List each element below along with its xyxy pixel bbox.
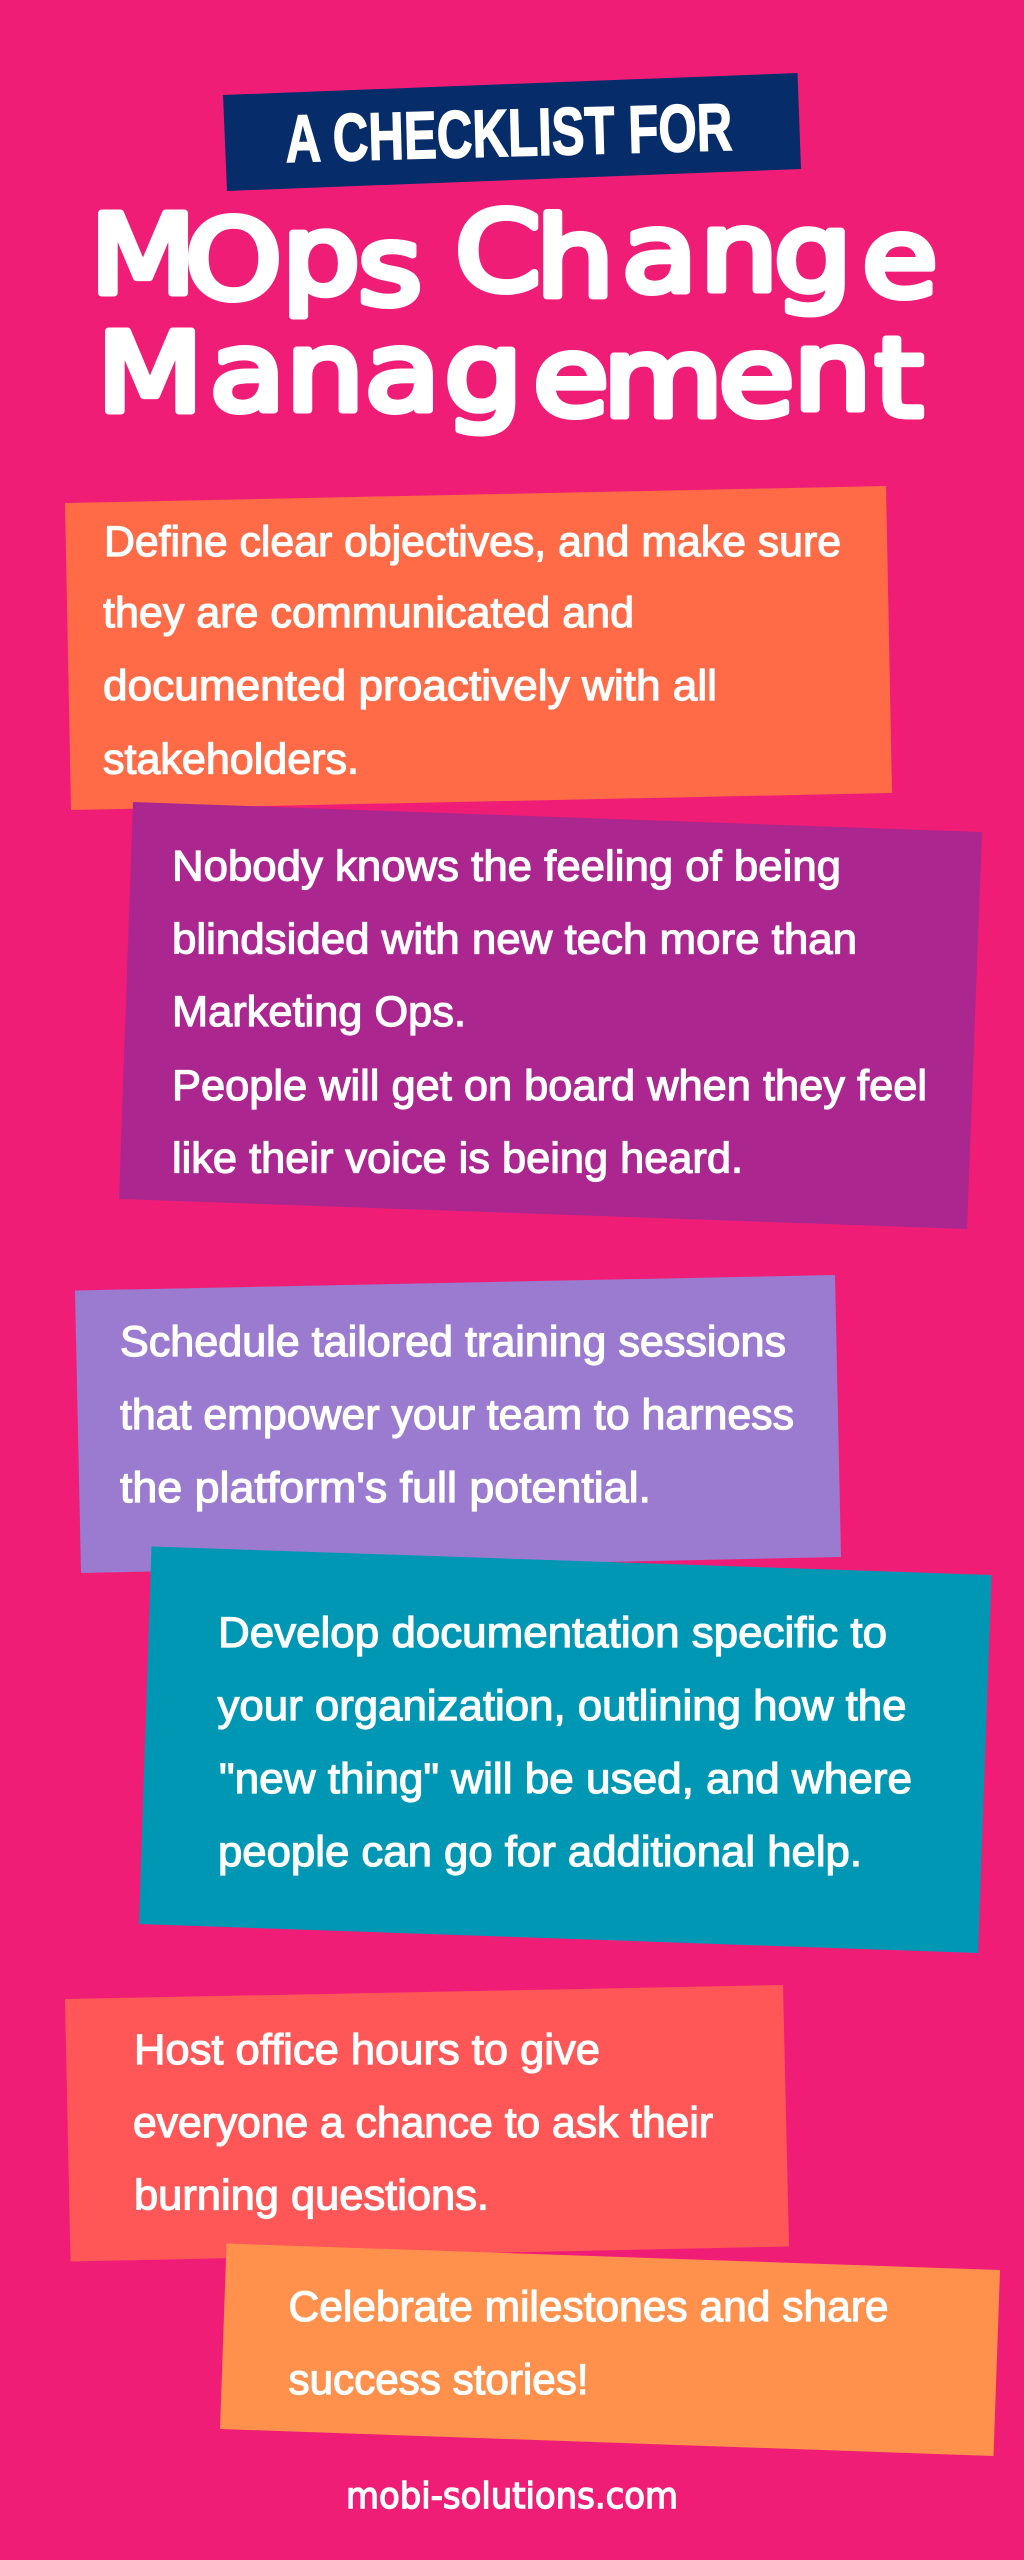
panel shape: [65, 1985, 789, 2262]
panel text: Nobody knows the feeling of being: [172, 842, 841, 890]
title: [90, 188, 938, 442]
panel text: Host office hours to give: [134, 2026, 600, 2074]
panel: define clear objectives: stakeholders.: [103, 736, 359, 784]
panel shape: [75, 1275, 841, 1573]
panel text: Schedule tailored training sessions: [120, 1318, 786, 1366]
panel: define clear objectives: they are communicated and: [103, 589, 634, 637]
panel: develop documentation: your organization, outlining how the: [218, 1682, 906, 1730]
title line 1: MOps Change: [90, 188, 938, 330]
panel: schedule tailored training: [75, 1275, 841, 1573]
panel: nobody knows the feeling: [119, 802, 982, 1229]
title line 2: Management: [97, 307, 923, 442]
panel: develop documentation: "new thing" will be used, and where: [219, 1755, 912, 1803]
footer website: mobi-solutions.com: [346, 2476, 678, 2517]
panel: define clear objectives: documented proactively with all: [103, 662, 717, 710]
panel: schedule tailored training: the platform's full potential.: [120, 1464, 651, 1512]
panel: host office hours: [65, 1985, 789, 2262]
panel shape: [65, 486, 892, 810]
panel: develop documentation: people can go for additional help.: [218, 1828, 862, 1876]
panel text: Develop documentation specific to: [218, 1609, 887, 1657]
panel: nobody knows the feeling: blindsided with new tech more than: [172, 916, 857, 964]
panel: nobody knows the feeling: like their voice is being heard.: [172, 1134, 743, 1182]
panel shape: [139, 1546, 992, 1953]
panel: host office hours: burning questions.: [134, 2172, 489, 2220]
panel: nobody knows the feeling: People will get on board when they feel: [172, 1062, 927, 1110]
panel: host office hours: everyone a chance to ask their: [133, 2099, 713, 2147]
panel: nobody knows the feeling: Marketing Ops.: [172, 988, 466, 1036]
panel text: Define clear objectives, and make sure: [104, 518, 841, 566]
panel: celebrate milestones: success stories!: [288, 2356, 588, 2404]
panel: celebrate milestones: [220, 2244, 1000, 2456]
heading banner: a checklist for: [223, 73, 801, 191]
panel: develop documentation: [139, 1546, 992, 1953]
banner text: A CHECKLIST FOR: [284, 90, 733, 177]
panel: schedule tailored training: that empower your team to harness: [120, 1391, 794, 1439]
panel text: Celebrate milestones and share: [288, 2283, 888, 2331]
banner shape: [223, 73, 801, 191]
panel: define clear objectives: [65, 486, 892, 810]
panel shape: [119, 802, 982, 1229]
panel shape: [220, 2244, 1000, 2456]
